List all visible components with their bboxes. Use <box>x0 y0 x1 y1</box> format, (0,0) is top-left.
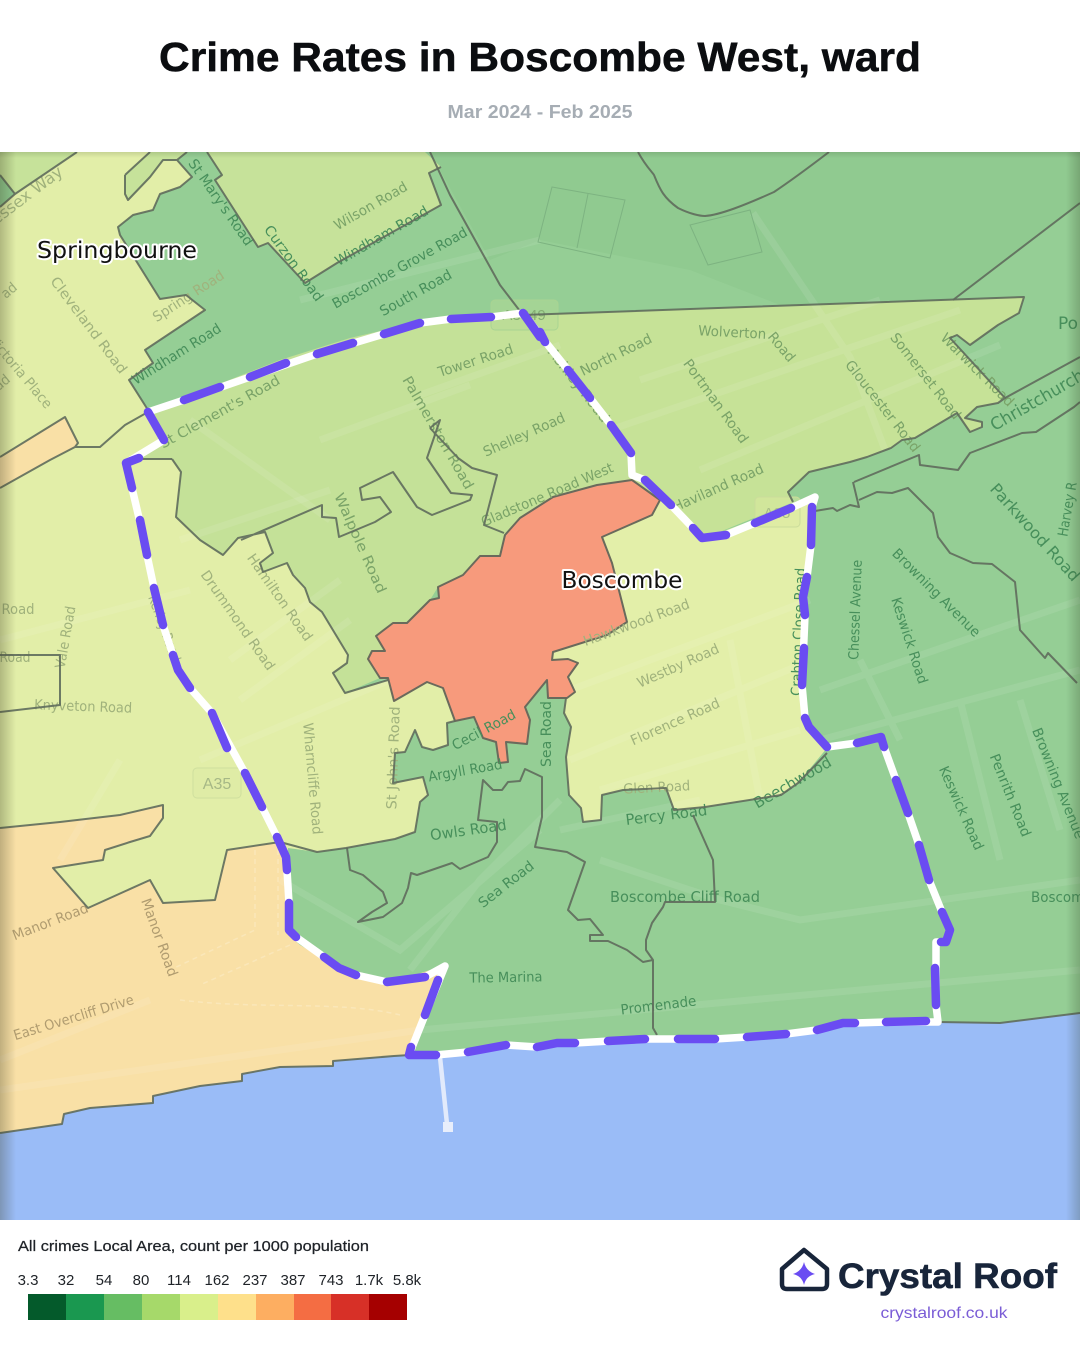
road labels on light green: Gloucester Road <box>841 357 923 456</box>
road labels on pale: Westby Road <box>635 641 722 692</box>
ward boundary: white casing <box>126 313 950 1055</box>
road labels on pale: Glen Road <box>623 778 691 798</box>
region: light green top-left corner <box>0 152 77 194</box>
region: small light green island <box>125 152 187 200</box>
road labels on green: Keswick Road <box>887 595 930 686</box>
region: light green ward north-east <box>523 297 1024 538</box>
road labels on orange: Manor Road <box>137 896 180 979</box>
road labels on pale: St John's Road <box>384 706 404 810</box>
road number badges: A35 <box>764 505 790 522</box>
road labels on green: Boscombe Cliff Road <box>610 888 760 906</box>
region: orange south-west <box>0 805 445 1133</box>
road labels on pale: Florence Road <box>628 696 722 749</box>
legend scale values: 237 <box>242 1272 268 1289</box>
road labels on green: Penrith Road <box>986 752 1034 839</box>
region: light green north-west block <box>207 152 441 283</box>
legend scale values: 32 <box>58 1272 74 1289</box>
road labels on orange <box>10 896 180 1044</box>
legend scale values: 114 <box>167 1272 191 1289</box>
hot-spot region: Boscombe in red <box>368 480 660 763</box>
place label: Springbourne: Springbourne <box>37 238 197 264</box>
road labels on green: South Road <box>377 267 455 320</box>
road labels on pale: Drummond Road <box>197 568 278 674</box>
legend scale values: 80 <box>133 1272 149 1289</box>
road labels on light green: Somerset Road <box>887 330 964 423</box>
legend scale values: 162 <box>204 1272 230 1289</box>
subtitle: date range: Mar 2024 - Feb 2025 <box>448 102 632 122</box>
road labels on green: Owls Road <box>429 816 508 844</box>
road labels on pale: Kerley Road <box>144 593 183 664</box>
road labels on green: Crabton Close Road <box>789 568 809 696</box>
road labels on green: Po <box>1058 314 1078 334</box>
pitch outlines <box>538 187 762 265</box>
road labels on light green: Tower Road <box>435 342 515 381</box>
road labels on green: The Marina <box>468 969 543 987</box>
road labels on green: Argyll Road <box>427 757 504 785</box>
legend scale values: 3.3 <box>18 1272 38 1289</box>
northern park patch <box>430 152 1080 305</box>
choropleth map panel <box>0 152 1080 1220</box>
road labels on green: Browning Avenue <box>888 546 983 641</box>
road labels on light green: Wilson Road <box>331 179 411 234</box>
region: pale east block <box>550 480 827 822</box>
road labels on light green: Haviland Road <box>670 461 766 516</box>
road labels on light green <box>157 179 1017 596</box>
icon: house with star <box>782 1250 827 1289</box>
road labels on light green: Walpole Road <box>330 491 389 596</box>
road labels on green: Chessel Avenue <box>846 560 866 660</box>
road labels on green: St Mary's Road <box>184 156 256 249</box>
road labels on pale: Hawkwood Road <box>581 597 692 650</box>
road labels on orange: East Overcliff Drive <box>12 992 136 1044</box>
place label: Boscombe: Boscombe <box>562 568 682 594</box>
road labels on green: Windham Road <box>129 321 224 388</box>
road labels on light green: St Clement's Road <box>157 373 283 452</box>
road labels on light green: Ashley Road <box>544 345 612 426</box>
legend scale values <box>18 1272 422 1289</box>
road labels on light green: Warwick Road <box>937 330 1017 410</box>
logo: Crystal Roof <box>782 1250 1057 1322</box>
legend title: All crimes Local Area, count per 1000 population <box>18 1238 369 1255</box>
road labels on pale: Wharncliffe Road <box>299 722 325 835</box>
road labels on green: Boscombe Grove Road <box>330 225 470 312</box>
road labels on light green: Wolverton <box>698 323 767 343</box>
road labels on light green: Shelley Road <box>481 410 568 461</box>
road labels on green: Parkwood Road <box>986 480 1080 585</box>
legend colour bar <box>28 1294 407 1320</box>
road labels on green: Cecil Road <box>449 707 519 754</box>
road labels on light green: Gladstone Road West <box>479 460 616 530</box>
road labels on orange: Manor Road <box>10 900 91 944</box>
region: dark green top-left wedge <box>0 175 15 207</box>
road labels on pale: Spring Road <box>150 268 228 326</box>
title: Crime Rates in Boscombe West, ward <box>159 34 921 80</box>
base map: green area <box>0 152 1080 1220</box>
legend scale values: 54 <box>96 1272 112 1289</box>
website address: crystalroof.co.uk <box>880 1305 1009 1322</box>
road labels on green: Sea Road <box>539 701 555 767</box>
road labels on green: Keswick Road <box>935 764 986 853</box>
road number badges: A35 <box>203 776 231 793</box>
ward boundary: purple dashes <box>126 313 950 1055</box>
road labels on pale: Hamilton Road <box>243 551 315 644</box>
road labels on pale: Cleveland Road <box>47 274 130 377</box>
legend scale values: 387 <box>280 1272 306 1289</box>
road number badges: A3049 <box>502 307 546 324</box>
road labels on light green: Portman Road <box>679 356 751 447</box>
road number badges <box>193 300 800 798</box>
area boundary lines <box>0 152 1080 1133</box>
region: orange small north-west <box>0 417 78 488</box>
region: pale western area <box>0 152 455 1140</box>
road labels on green: Beechwood <box>750 753 835 812</box>
legend scale values: 743 <box>318 1272 344 1289</box>
road labels on green: Windham Road <box>333 203 431 270</box>
road labels on pale: Road <box>0 650 30 666</box>
legend <box>18 1238 422 1320</box>
road labels on light green: Palmerston Road <box>399 374 476 492</box>
legend scale values: 5.8k <box>393 1272 422 1289</box>
logo wordmark: Crystal Roof <box>838 1257 1057 1296</box>
road labels on pale: Knyveton Road <box>34 697 132 717</box>
road labels on pale <box>0 162 722 835</box>
pier <box>440 1057 453 1132</box>
road labels on light green: North Road <box>578 331 655 380</box>
road labels on green: Sea Road <box>476 858 537 911</box>
sea <box>0 1013 1080 1220</box>
road labels on pale: Vale Road <box>53 605 79 670</box>
road labels on light green: Road <box>764 329 798 366</box>
road labels on green <box>129 156 1080 1019</box>
legend scale values: 1.7k <box>355 1272 384 1289</box>
road labels on green: Curzon Road <box>260 223 326 305</box>
road labels on pale: Road <box>2 602 34 618</box>
road labels on green: Percy Road <box>625 801 708 829</box>
region: light green ward north <box>141 315 632 693</box>
road labels on green: Promenade <box>620 993 697 1019</box>
